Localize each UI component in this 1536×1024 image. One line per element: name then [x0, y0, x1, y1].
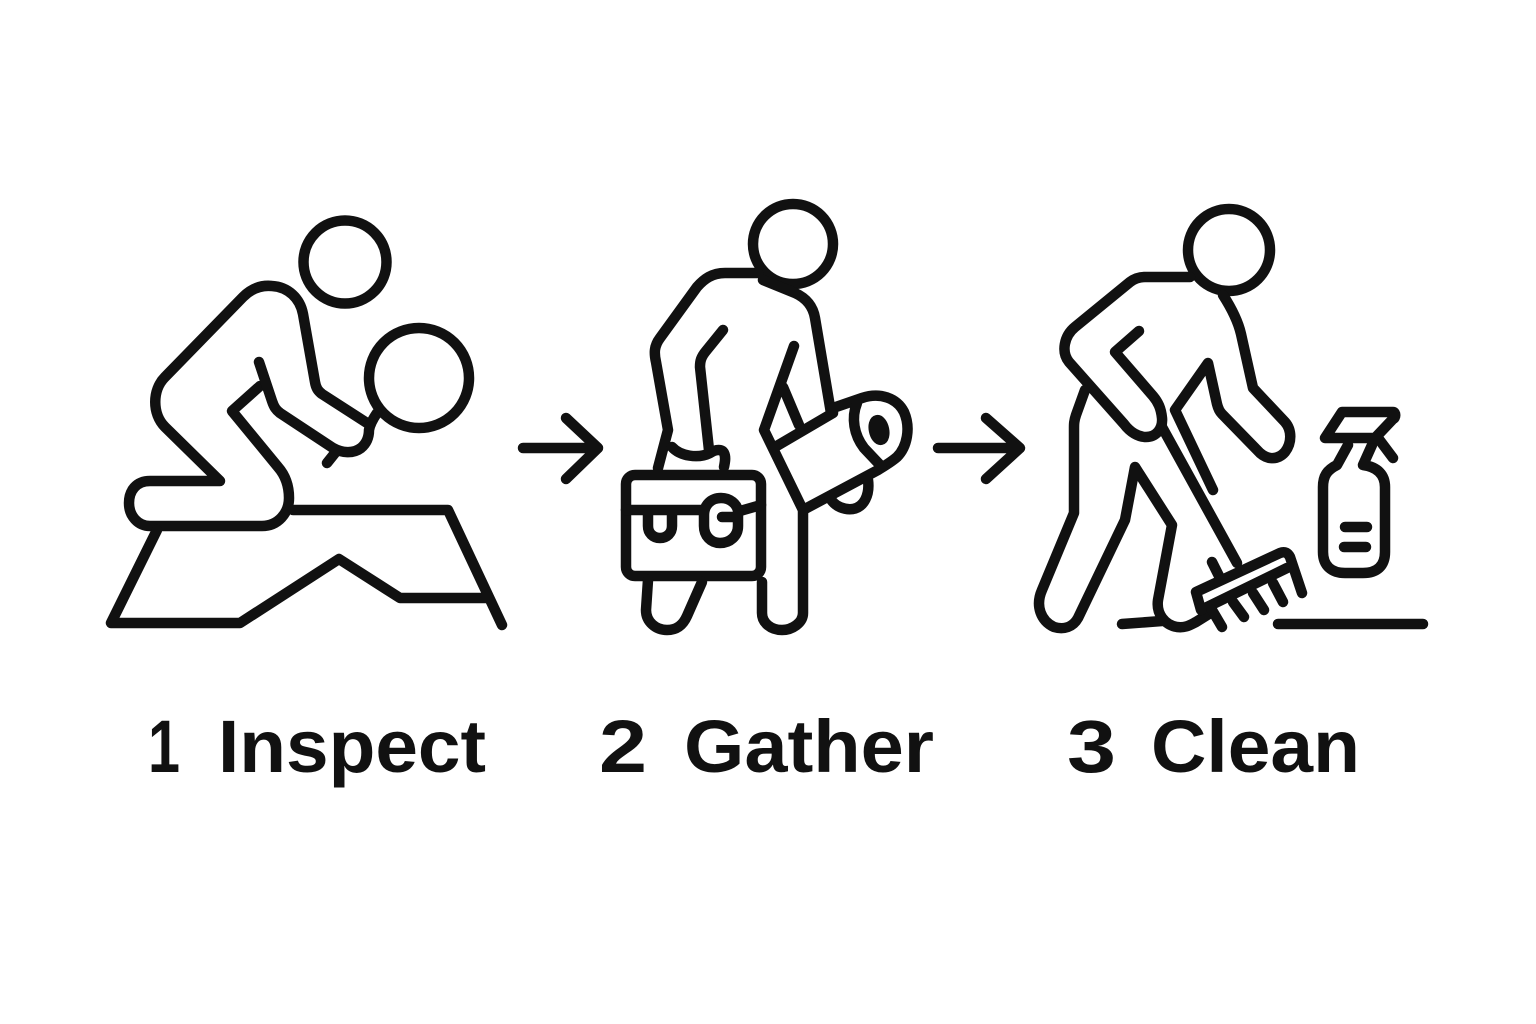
spray bottle [1323, 412, 1395, 573]
label: step 2 Gather: 2 [599, 705, 647, 788]
magnifying glass lens [369, 328, 469, 428]
arrow: step 2 to step 3 [938, 418, 1020, 479]
paper roll [775, 396, 908, 510]
icon: person carrying toolbox and roll [626, 204, 908, 630]
arrow: step 1 to step 2 [523, 418, 598, 479]
legs and foot [1039, 390, 1212, 628]
head [1188, 209, 1270, 291]
floor line [1278, 619, 1423, 629]
torso and left arm [1064, 277, 1190, 437]
label: step 1 Inspect: 1 [148, 705, 180, 788]
head of person [304, 220, 386, 304]
label: step 1 Inspect: Inspect [218, 705, 486, 788]
icon: person cleaning with brush and spray bottle [1039, 209, 1423, 628]
label: step 3 Clean [1067, 705, 1360, 788]
left leg [646, 580, 702, 630]
label: step 3 Clean: 3 [1067, 705, 1116, 788]
right arm and inner body [1175, 295, 1290, 490]
label: step 2 Gather: Gather [684, 705, 934, 788]
table or floor surface [111, 510, 502, 625]
torso and back [655, 273, 831, 468]
front body and right leg [762, 346, 803, 630]
body and raised arm [129, 286, 367, 526]
carrying arm and hand [672, 330, 725, 467]
head [753, 204, 833, 284]
brush [1162, 427, 1302, 627]
toolbox [626, 475, 761, 576]
label: step 3 Clean: Clean [1151, 705, 1360, 788]
icon: person inspecting surface [111, 220, 502, 625]
inner arm and hand [259, 362, 377, 463]
